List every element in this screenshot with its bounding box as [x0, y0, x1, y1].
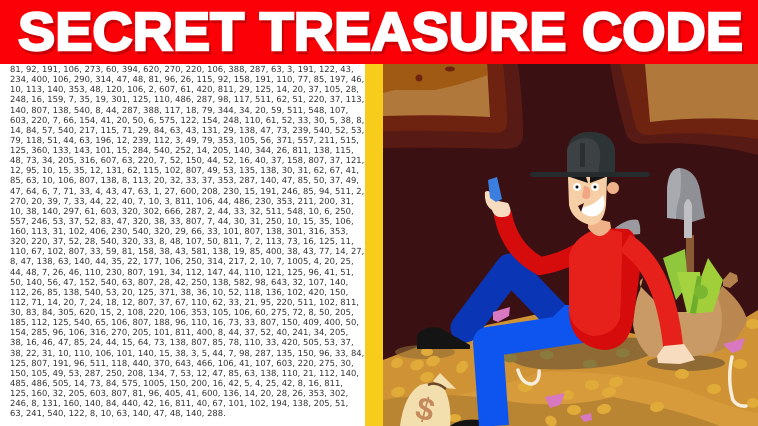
pearl necklaces: [518, 357, 746, 406]
coins in shadow: [503, 348, 630, 368]
front shoe: [450, 420, 492, 426]
rock behind shoulder: [615, 220, 640, 236]
neck: [588, 217, 611, 236]
near hand: [657, 344, 695, 364]
panel: cave illustration: [383, 64, 758, 426]
coins: [389, 319, 758, 426]
dollar sack: [400, 373, 456, 426]
hat: [530, 132, 650, 177]
icon: blue stone: [488, 177, 502, 202]
title: SECRET TREASURE CODE: [18, 2, 743, 62]
yellow divider strip: [365, 64, 383, 426]
man: [417, 132, 695, 426]
cave wall upper left: [383, 64, 523, 149]
icon: shovel: [667, 168, 705, 285]
shoe back: [417, 327, 470, 349]
title banner: [0, 0, 758, 65]
near arm: [625, 243, 673, 346]
far arm: [503, 215, 585, 266]
money bag: [633, 249, 747, 357]
pink gems and cups: [493, 307, 745, 422]
title: SECRET TREASURE CODE: [20, 5, 745, 65]
shadow under hand: [647, 355, 725, 371]
treasure floor: [383, 310, 758, 426]
cave wall upper right: [610, 64, 758, 155]
panel: code numbers text block: 81, 92, 191, 106, 273, 60, 394, 620, 270, 220, 106, 388, 287, 63, 3, 191, 122, 43, 234, 400, 106, 290, 314, 47, 48, 81, 96, 26, 115, 92, 158, 191, 110, 77, 85, 197, 46, 10, 113, 140, 353, 48, 120, 106, 2, 607, 61, 420, 811, 29, 125, 14, 20, 37, 105, 28, 248, 16, 159, 7, 35, 19, 301, 125, 110, 486, 287, 98, 117, 511, 62, 51, 220, 37, 113, 140, 807, 138, 540, 8, 44, 287, 388, 117, 18, 79, 344, 34, 20, 59, 511, 548, 107, 603, 220, 7, 66, 154, 41, 20, 50, 6, 575, 122, 154, 248, 110, 61, 52, 33, 30, 5, 38, 8, 14, 84, 57, 540, 217, 115, 71, 29, 84, 63, 43, 131, 29, 138, 47, 73, 239, 540, 52, 53, 79, 118, 51, 44, 63, 196, 12, 239, 112, 3, 49, 79, 353, 105, 56, 371, 557, 211, 515, 125, 360, 133, 143, 101, 15, 284, 540, 252, 14, 205, 140, 344, 26, 811, 138, 115, 48, 73, 34, 205, 316, 607, 63, 220, 7, 52, 150, 44, 52, 16, 40, 37, 158, 807, 37, 121, 12, 95, 10, 15, 35, 12, 131, 62, 115, 102, 807, 49, 53, 135, 138, 30, 31, 62, 67, 41, 85, 63, 10, 106, 807, 138, 8, 113, 20, 32, 33, 37, 353, 287, 140, 47, 85, 50, 37, 49, 47, 64, 6, 7, 71, 33, 4, 43, 47, 63, 1, 27, 600, 208, 230, 15, 191, 246, 85, 94, 511, 2, 270, 20, 39, 7, 33, 44, 22, 40, 7, 10, 3, 811, 106, 44, 486, 230, 353, 211, 200, 31, 10, 38, 140, 297, 61, 603, 320, 302, 666, 287, 2, 44, 33, 32, 511, 548, 10, 6, 250, 557, 246, 53, 37, 52, 83, 47, 320, 38, 33, 807, 7, 44, 30, 31, 250, 10, 15, 35, 106, 160, 113, 31, 102, 406, 230, 540, 320, 29, 66, 33, 101, 807, 138, 301, 316, 353, 320, 220, 37, 52, 28, 540, 320, 33, 8, 48, 107, 50, 811, 7, 2, 113, 73, 16, 125, 11, 110, 67, 102, 807, 33, 59, 81, 158, 38, 43, 581, 138, 19, 85, 400, 38, 43, 77, 14, 27, 8, 47, 138, 63, 140, 44, 35, 22, 177, 106, 250, 314, 217, 2, 10, 7, 1005, 4, 20, 25, 44, 48, 7, 26, 46, 110, 230, 807, 191, 34, 112, 147, 44, 110, 121, 125, 96, 41, 51, 50, 140, 56, 47, 152, 540, 63, 807, 28, 42, 250, 138, 582, 98, 643, 32, 107, 140, 112, 26, 85, 138, 540, 53, 20, 125, 371, 38, 36, 10, 52, 118, 136, 102, 420, 150, 112, 71, 14, 20, 7, 24, 18, 12, 807, 37, 67, 110, 62, 33, 21, 95, 220, 511, 102, 811, 30, 83, 84, 305, 620, 15, 2, 108, 220, 106, 353, 105, 106, 60, 275, 72, 8, 50, 205, 185, 112, 125, 540, 65, 106, 807, 188, 96, 110, 16, 73, 33, 807, 150, 409, 400, 50, 154, 285, 96, 106, 316, 270, 205, 101, 811, 400, 8, 44, 37, 52, 40, 241, 34, 205, 38, 16, 46, 47, 85, 24, 44, 15, 64, 73, 138, 807, 85, 78, 110, 33, 420, 505, 53, 37, 38, 22, 31, 10, 110, 106, 101, 140, 15, 38, 3, 5, 44, 7, 98, 287, 135, 150, 96, 33, 84, 125, 807, 191, 96, 511, 118, 440, 370, 643, 466, 106, 41, 107, 603, 220, 275, 30, 150, 105, 49, 53, 287, 250, 208, 134, 7, 53, 12, 47, 85, 63, 138, 110, 21, 112, 140, 485, 486, 505, 14, 73, 84, 575, 1005, 150, 200, 16, 42, 5, 4, 25, 42, 8, 16, 811, 125, 160, 32, 205, 603, 807, 81, 96, 405, 41, 600, 136, 14, 20, 28, 26, 353, 302, 246, 8, 131, 160, 140, 84, 440, 42, 16, 811, 40, 67, 101, 102, 194, 138, 205, 51, 63, 241, 540, 122, 8, 10, 63, 140, 47, 48, 140, 288.: [10, 64, 364, 418]
shadow under man: [500, 337, 653, 369]
head: [568, 177, 619, 225]
front leg: [488, 326, 595, 426]
back leg: [465, 268, 558, 328]
cash: [663, 249, 723, 314]
raised hand: [485, 191, 510, 217]
torso: [569, 228, 640, 350]
